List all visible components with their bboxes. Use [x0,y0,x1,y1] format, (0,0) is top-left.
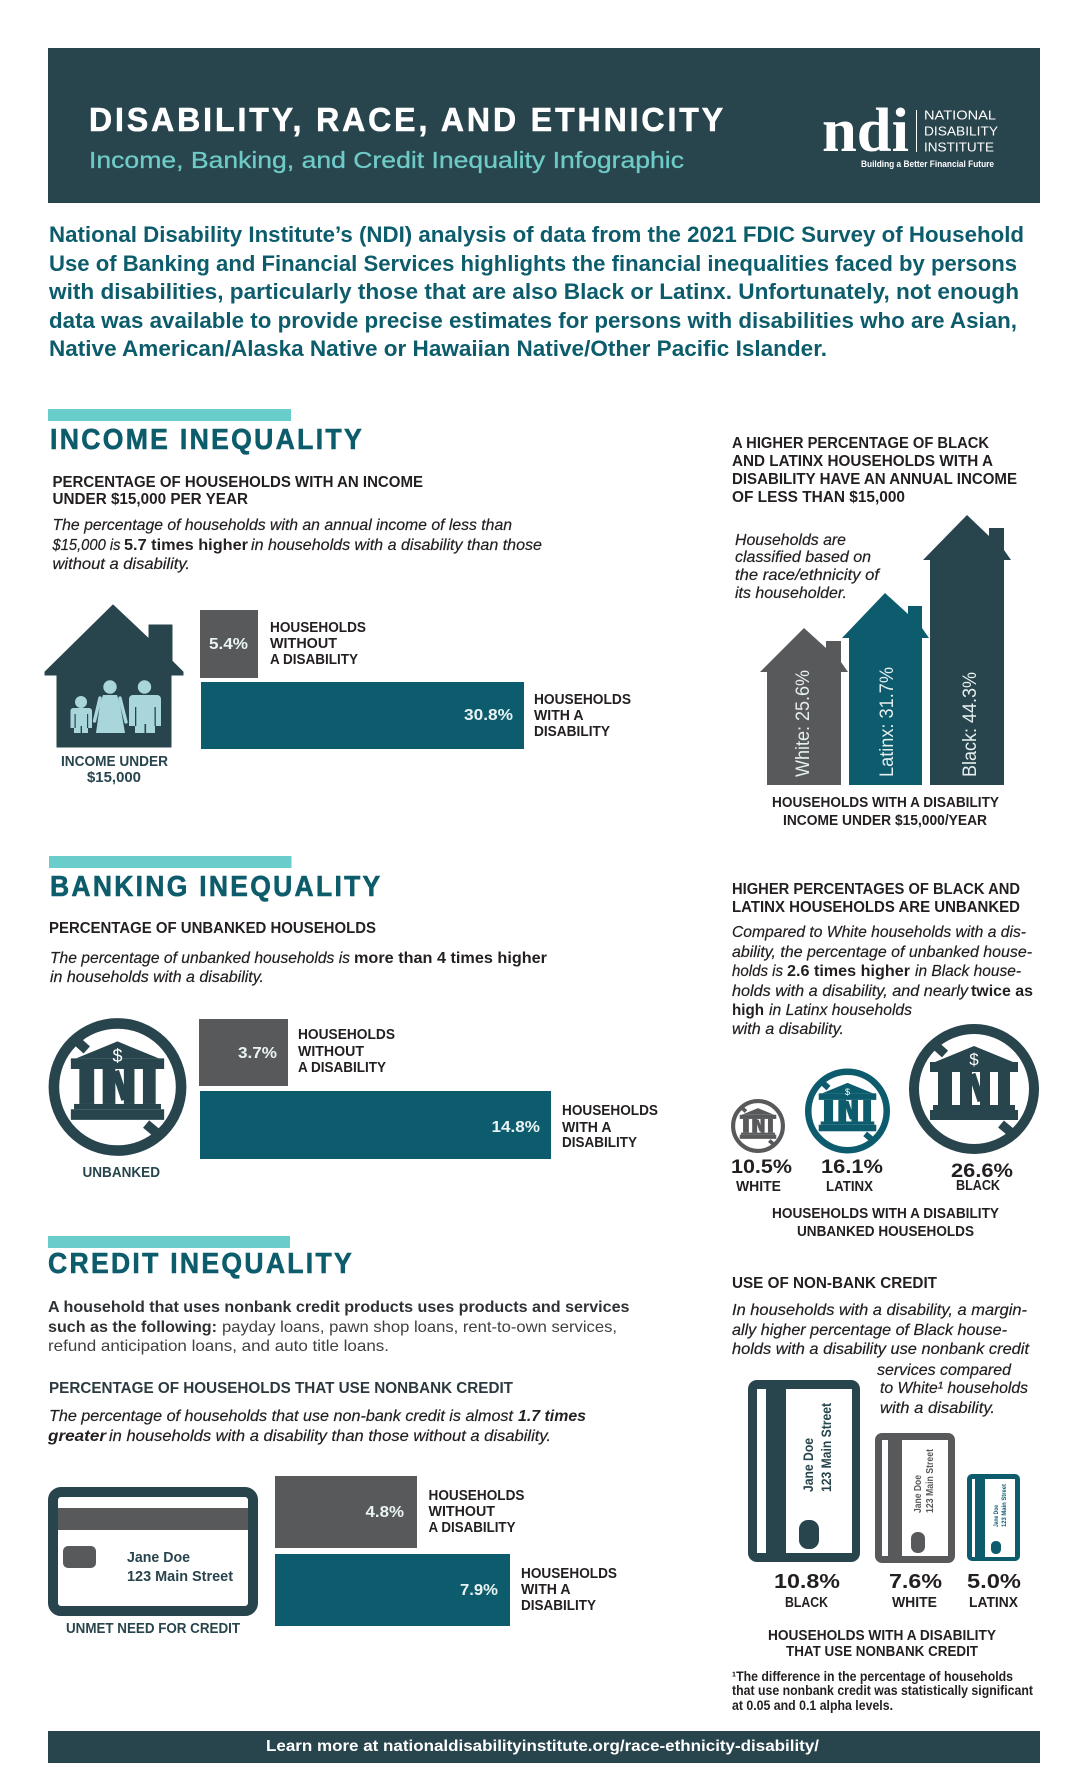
icon: black credit card [748,1380,860,1562]
text: credit description: The percentage of households that use non-bank credit is almost [49,1408,514,1425]
text: credit description [47,1408,586,1445]
text: classification note: Households are [735,532,846,549]
text: unbanked comparison: high [732,1002,764,1019]
bar: with a disability 30.8 [201,682,631,749]
stat: white 10.5: 10.5% [731,1157,792,1178]
text: non-bank description: to White¹ households [880,1380,1028,1397]
label: income under: INCOME UNDER [61,754,168,770]
bar: with a disability 7.9: HOUSEHOLDS [521,1566,617,1582]
panel: credit inequality [47,1236,630,1637]
subheading: unbanked households: PERCENTAGE OF UNBANKED HOUSEHOLDS [49,920,376,937]
caption: use nonbank credit [768,1628,996,1660]
icon: white unbanked [733,1101,783,1151]
bar: without a disability 5.4: 5.4% [209,636,248,653]
text: banking description: The percentage of unbanked households is [50,950,350,967]
caption: unbanked households [772,1206,999,1240]
stat: black 10.8 [774,1571,840,1611]
text: unbanked comparison [732,924,1033,1038]
footnote: that use nonbank credit was statistically significant [732,1683,1033,1698]
heading: higher percentage: OF LESS THAN $15,000 [732,489,905,506]
panel: unbanked by race [731,881,1034,1240]
heading: use of non-bank credit: USE OF NON-BANK CREDIT [732,1275,938,1292]
icon: credit card: Jane Doe [127,1549,190,1566]
subtitle: Income, Banking, and Credit Inequality Infographic [89,147,684,173]
text: classification note [735,532,881,602]
bar: with a disability 30.8: 30.8% [464,707,513,724]
text: unbanked comparison: 2.6 times higher [787,963,910,980]
stat: latinx 5.0: LATINX [969,1595,1018,1611]
title: DISABILITY, RACE, AND ETHNICITY [89,101,726,138]
subheading: use nonbank credit: PERCENTAGE OF HOUSEHOLDS THAT USE NONBANK CREDIT [49,1380,514,1397]
bar: with a disability 14.8 [200,1091,658,1159]
icon: unbanked: $ [112,1046,123,1066]
bar: without a disability 5.4 [200,610,366,678]
logo: ndi: ndi [822,97,909,165]
bar: without a disability 3.7: A DISABILITY [298,1060,386,1076]
stat: black 10.8: BLACK [785,1595,828,1611]
footnote [732,1669,1033,1713]
house bar: white 25.6: White: 25.6% [793,670,814,777]
heading: higher percentages unbanked: LATINX HOUSEHOLDS ARE UNBANKED [732,899,1020,916]
logo: ndi: NATIONAL [924,108,996,122]
caption: use nonbank credit: HOUSEHOLDS WITH A DISABILITY [768,1628,996,1644]
icon: black unbanked [914,1029,1034,1149]
text: non-bank description: holds with a disability use nonbank credit [732,1341,1030,1358]
icon: credit card [53,1492,253,1611]
text: unbanked comparison: in Black house- [915,963,1021,980]
bar: without a disability 3.7 [199,1019,395,1086]
bar: with a disability 30.8: HOUSEHOLDS [534,692,631,708]
bar: without a disability 4.8: WITHOUT [428,1504,495,1520]
text: non-bank description: services compared [877,1362,1012,1379]
stat: latinx 5.0 [967,1571,1021,1611]
logo: ndi: DISABILITY [924,124,999,138]
text: non-bank description [732,1302,1030,1417]
text: classification note: the race/ethnicity of [735,567,881,584]
heading: higher percentages unbanked: HIGHER PERCENTAGES OF BLACK AND [732,881,1020,898]
heading: credit inequality: CREDIT INEQUALITY [48,1248,354,1280]
icon: latinx credit card: 123 Main Street [1002,1484,1008,1527]
bar: without a disability 4.8: A DISABILITY [428,1520,516,1536]
text: credit description: 1.7 times [518,1408,586,1425]
icon: latinx credit card [967,1474,1020,1561]
icon: black credit card: 123 Main Street [818,1403,834,1492]
text: classification note: its householder. [735,585,847,602]
panel: income by race [732,435,1017,829]
stat: latinx 16.1 [821,1157,883,1195]
caption: unbanked households: HOUSEHOLDS WITH A DISABILITY [772,1206,999,1222]
bar: with a disability 14.8: 14.8% [492,1119,540,1136]
text: unbanked comparison: in Latinx households [769,1002,912,1019]
bar: without a disability 4.8: 4.8% [366,1504,404,1521]
text: income description: 5.7 times higher [124,537,248,554]
intro paragraph: with disabilities, particularly those that are also Black or Latinx. Unfortunately, not enough [48,279,1019,304]
bar: without a disability 4.8: HOUSEHOLDS [428,1488,525,1504]
bar: with a disability 7.9: DISABILITY [521,1598,596,1614]
text: banking description [50,950,547,986]
stat: white 7.6: 7.6% [889,1571,942,1593]
stat: black 26.6: BLACK [956,1178,1000,1194]
text: credit description: greater [47,1428,107,1445]
stat: latinx 16.1: 16.1% [821,1157,883,1178]
heading: higher percentages unbanked [732,881,1020,916]
icon: latinx unbanked [808,1072,887,1150]
label: income under [61,754,168,786]
logo: ndi: Building a Better Financial Future [861,159,994,169]
text: classification note: classified based on [735,549,871,566]
house bar: latinx 31.7 [842,593,929,785]
text: unbanked comparison: holds with a disability, and nearly [732,983,969,1000]
stat: latinx 16.1: LATINX [826,1179,873,1195]
text: banking description: in households with a disability. [50,969,264,986]
text: unbanked comparison: twice as [971,983,1033,1000]
bar: without a disability 3.7: WITHOUT [298,1044,364,1060]
bar: with a disability 7.9: 7.9% [460,1582,498,1599]
bar: without a disability 5.4: HOUSEHOLDS [270,620,366,636]
heading: income inequality: INCOME INEQUALITY [50,424,364,456]
caption: unbanked households: UNBANKED HOUSEHOLDS [797,1224,974,1240]
intro paragraph: Native American/Alaska Native or Hawaiian Native/Other Pacific Islander. [49,336,827,361]
text: credit description: in households with a disability than those without a disability. [109,1428,551,1445]
caption: income under 15000 per year: HOUSEHOLDS WITH A DISABILITY [772,795,999,811]
icon: white credit card: 123 Main Street [925,1448,936,1513]
house bar: latinx 31.7: Latinx: 31.7% [877,667,898,777]
intro paragraph: data was available to provide precise estimates for persons with disabilities who are Asian, [49,308,1017,333]
panel: income inequality [45,409,631,786]
intro paragraph [48,222,1024,361]
text: unbanked comparison: with a disability. [732,1021,844,1038]
footnote: at 0.05 and 0.1 alpha levels. [732,1698,893,1713]
text: nonbank credit definition [48,1299,630,1355]
stat: black 26.6: 26.6% [951,1161,1013,1182]
icon: unbanked [54,1023,181,1151]
house bar: black 44.3 [923,515,1011,785]
bar: with a disability 7.9: WITH A [521,1582,571,1598]
text: non-bank description: In households with a disability, a margin- [732,1302,1027,1319]
stat: white 10.5: WHITE [736,1179,781,1195]
stat: latinx 5.0: 5.0% [967,1571,1021,1593]
label: unmet need for credit: UNMET NEED FOR CREDIT [66,1621,240,1637]
subheading: income under 15000: PERCENTAGE OF HOUSEHOLDS WITH AN INCOME [52,474,423,491]
text: unbanked comparison: ability, the percentage of unbanked house- [732,944,1032,961]
bar: without a disability 3.7: HOUSEHOLDS [298,1027,395,1043]
logo: ndi: INSTITUTE [924,140,994,154]
intro paragraph: Use of Banking and Financial Services highlights the financial inequalities faced by persons [49,251,1017,276]
bar: with a disability 14.8: DISABILITY [562,1135,637,1151]
label: income under: $15,000 [87,770,141,786]
bar: without a disability 4.8 [275,1476,525,1548]
icon: latinx credit card: Jane Doe [994,1504,1000,1527]
panel: non-bank credit by race [732,1275,1033,1713]
stat: white 10.5 [731,1157,792,1195]
text: nonbank credit definition: such as the following: [48,1319,217,1336]
bar: without a disability 3.7: 3.7% [238,1045,277,1062]
icon: latinx unbanked: $ [845,1087,850,1097]
text: non-bank description: ally higher percentage of Black house- [732,1322,1007,1339]
house bar: white 25.6 [760,628,848,785]
text: non-bank description: with a disability. [880,1400,995,1417]
house bar: black 44.3: Black: 44.3% [960,672,981,777]
icon: black credit card: Jane Doe [800,1438,816,1492]
caption: income under 15000 per year [772,795,999,829]
heading: higher percentage: DISABILITY HAVE AN ANNUAL INCOME [732,471,1017,488]
header banner [48,48,1040,203]
stat: black 26.6 [951,1161,1013,1194]
heading: higher percentage: AND LATINX HOUSEHOLDS WITH A [732,453,993,470]
bar: with a disability 30.8: WITH A [534,708,584,724]
bar: with a disability 30.8: DISABILITY [534,724,610,740]
text: income description: without a disability. [52,556,190,573]
stat: white 7.6: WHITE [892,1595,937,1611]
caption: income under 15000 per year: INCOME UNDER $15,000/YEAR [783,813,988,829]
bar: with a disability 7.9 [275,1554,617,1626]
stat: white 7.6 [889,1571,942,1611]
icon: white credit card [875,1433,955,1563]
bar: with a disability 14.8: HOUSEHOLDS [562,1103,658,1119]
stat: black 10.8: 10.8% [774,1571,840,1593]
panel: banking inequality [49,856,658,1181]
icon: credit card: 123 Main Street [127,1568,233,1585]
icon: house with family [45,605,183,747]
text: income description [52,517,542,573]
icon: white credit card: Jane Doe [913,1475,924,1513]
heading: banking inequality: BANKING INEQUALITY [50,871,382,903]
text: banking description: more than 4 times higher [354,950,547,967]
heading: higher percentage: A HIGHER PERCENTAGE OF BLACK [732,435,990,452]
intro paragraph: National Disability Institute’s (NDI) analysis of data from the 2021 FDIC Survey of Household [49,222,1024,247]
caption: use nonbank credit: THAT USE NONBANK CREDIT [786,1644,978,1660]
text: unbanked comparison: Compared to White households with a dis- [732,924,1026,941]
text: income description: in households with a disability than those [251,537,542,554]
text: nonbank credit definition: A household that uses nonbank credit products uses products and services [48,1299,630,1316]
text: nonbank credit definition: refund anticipation loans, and auto title loans. [48,1338,389,1355]
subheading: income under 15000: UNDER $15,000 PER YEAR [52,491,248,508]
footer bar: Learn more at nationaldisabilityinstitute.org/race-ethnicity-disability/ [266,1738,820,1755]
bar: without a disability 5.4: A DISABILITY [270,652,358,668]
bar: with a disability 14.8: WITH A [562,1120,612,1136]
label: unbanked: UNBANKED [82,1165,160,1181]
text: nonbank credit definition: payday loans, pawn shop loans, rent-to-own services, [222,1319,617,1336]
text: income description: The percentage of households with an annual income of less than [52,517,512,534]
logo: ndi [822,97,999,169]
subheading: income under 15000 [52,474,423,508]
footnote: ¹The difference in the percentage of households [732,1669,1013,1684]
text: income description: $15,000 is [52,537,121,554]
heading: higher percentage [732,435,1017,506]
footer bar [48,1731,1040,1763]
text: unbanked comparison: holds is [732,963,783,980]
bar: without a disability 5.4: WITHOUT [270,636,337,652]
icon: black unbanked: $ [969,1050,979,1069]
